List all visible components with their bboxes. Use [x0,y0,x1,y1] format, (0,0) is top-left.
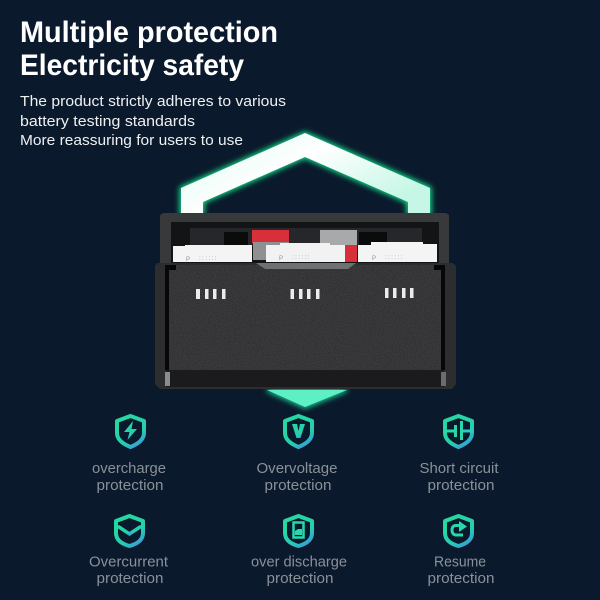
label: protection [266,570,334,587]
side rails [165,265,176,370]
description text: battery testing standards [20,113,195,130]
batteries: :::::: [199,256,218,262]
feature: overcharge protection [92,416,166,494]
title: Multiple protection [20,16,278,49]
title: Electricity safety [20,49,244,82]
glowing hexagon [181,133,430,407]
charger device [155,213,456,389]
card slots [224,230,387,262]
label: protection [264,477,332,494]
batteries: :::::: [385,255,404,261]
batteries: P [186,257,190,263]
label: protection [428,570,494,587]
description text: The product strictly adheres to various [20,93,286,110]
label: Resume [434,554,486,570]
icon: lightning shield [117,416,144,447]
feature: resume protection [428,516,494,587]
label [89,554,169,587]
label: Overvoltage [256,460,338,477]
label: protection [428,477,494,494]
icon: V shield [285,416,312,447]
label: protection [96,477,164,494]
device front case [155,263,456,389]
label [92,460,166,494]
title [20,16,278,82]
label [420,460,499,494]
indicator lights [196,288,414,299]
icon: chevron shield [116,516,143,546]
feature: over discharge protection [251,516,347,587]
label: Overcurrent [89,554,169,570]
batteries: P [279,256,283,262]
feature: overcurrent protection [89,516,169,587]
device back housing [160,213,449,264]
label [256,460,338,494]
label [251,554,347,587]
icon: circuit shield [444,416,473,447]
icon: battery shield [285,516,312,546]
label: Short circuit [420,460,499,477]
batteries [173,242,437,263]
label [428,554,494,587]
description text [20,93,286,149]
label: protection [96,570,164,587]
batteries: :::::: [292,255,311,261]
feature: short circuit protection [420,416,499,494]
description text: More reassuring for users to use [20,132,243,149]
front case bottom band [166,370,444,387]
label: over discharge [251,554,347,570]
front case top notch [256,263,356,269]
label: overcharge [92,460,166,477]
feature: overvoltage protection [256,416,338,494]
icon: return arrow shield [445,516,472,546]
batteries: P [372,256,376,262]
